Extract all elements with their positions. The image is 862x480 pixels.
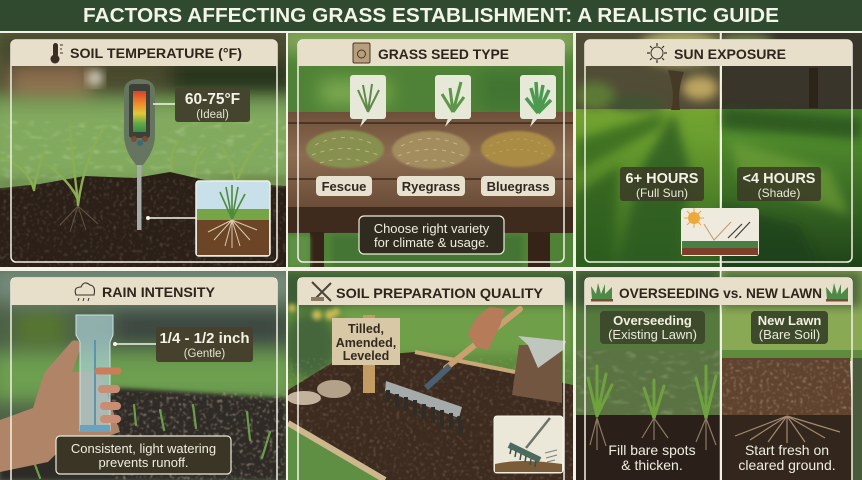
heading: grass seed type: GRASS SEED TYPE (378, 46, 509, 62)
icon: hand and rain gauge (0, 315, 120, 472)
callout: ideal temperature: (Ideal) (196, 109, 229, 121)
text: fill bare spots: Fill bare spots (608, 442, 696, 458)
callout: choose variety: for climate & usage. (374, 235, 489, 250)
seed card: bluegrass (520, 75, 556, 127)
label: bluegrass: Bluegrass (487, 179, 549, 194)
heading: overseeding vs new lawn (585, 278, 852, 305)
label: full sun: (Full Sun) (636, 186, 688, 200)
sign (332, 315, 400, 393)
flowers (288, 304, 340, 320)
text: start fresh (738, 442, 836, 473)
text: start fresh: Start fresh on (745, 442, 829, 458)
soil bed (288, 352, 573, 480)
overseeding side (576, 271, 721, 480)
callout: gentle rain (113, 327, 253, 362)
heading: overseeding vs new lawn: OVERSEEDING vs. NEW LAWN (619, 285, 822, 301)
label: new lawn: (Bare Soil) (759, 327, 820, 342)
callout: consistent watering: prevents runoff. (98, 455, 189, 470)
callout: gentle rain: (Gentle) (184, 348, 225, 360)
callout: choose variety (359, 216, 504, 254)
frame (298, 40, 564, 262)
table (288, 112, 573, 267)
seed card: fescue (350, 75, 386, 127)
panel: sun exposure (575, 30, 862, 267)
panel: grass seed type (280, 28, 580, 267)
heading: sun exposure (585, 40, 852, 66)
panel: soil temperature (0, 25, 300, 267)
panel: rain intensity (0, 265, 300, 480)
label: bluegrass (481, 176, 555, 196)
text: fill bare spots: & thicken. (621, 457, 683, 473)
label: new lawn (751, 311, 828, 344)
title banner: FACTORS AFFECTING GRASS ESTABLISHMENT: A REALISTIC GUIDE (83, 4, 779, 27)
callout: consistent watering: Consistent, light watering (71, 441, 216, 456)
label: new lawn: New Lawn (758, 313, 821, 328)
frame (11, 278, 277, 480)
wet soil (0, 388, 286, 480)
icon: soil bag (512, 336, 566, 403)
callout: gentle rain: 1/4 - 1/2 inch (159, 330, 250, 347)
frame (585, 278, 852, 480)
title banner (0, 0, 862, 31)
panel: soil preparation (280, 271, 580, 480)
full sun side (575, 30, 722, 267)
heading: rain intensity (11, 278, 277, 305)
label: shade (737, 167, 821, 201)
shade side (717, 33, 862, 267)
label: overseeding: (Existing Lawn) (608, 327, 697, 342)
callout: consistent watering (56, 436, 231, 474)
label: fescue (316, 176, 372, 196)
inset: root diagram (146, 181, 270, 256)
heading: grass seed type (298, 40, 564, 66)
callout: ideal temperature: 60-75°F (185, 91, 240, 108)
sign: Amended, (336, 336, 396, 350)
label: ryegrass: Ryegrass (402, 179, 460, 194)
seed card: ryegrass (435, 75, 471, 127)
heading: rain intensity: RAIN INTENSITY (102, 285, 215, 300)
icon: rake and hand (385, 307, 520, 433)
icon: soil probe meter (124, 79, 155, 230)
sign: Tilled, (348, 322, 384, 336)
heading: soil temperature (11, 40, 277, 66)
text: start fresh: cleared ground. (738, 457, 836, 473)
new lawn side (722, 271, 862, 480)
frame (585, 40, 852, 262)
frame (298, 278, 564, 480)
label: overseeding (600, 311, 705, 344)
callout: choose variety: Choose right variety (374, 221, 490, 236)
inset: rake diagram (494, 416, 563, 473)
label: overseeding: Overseeding (613, 313, 692, 328)
label: full sun: 6+ HOURS (626, 171, 699, 187)
label: shade: (Shade) (758, 186, 800, 200)
heading: soil temperature: SOIL TEMPERATURE (°F) (70, 46, 242, 61)
text: fill bare spots (608, 442, 696, 473)
heading: sun exposure: SUN EXPOSURE (674, 46, 786, 62)
rocks (287, 380, 351, 405)
inset: sun angle diagram (681, 208, 759, 256)
frame (11, 40, 277, 262)
sign: Leveled (343, 349, 389, 363)
panel: overseeding vs new lawn (576, 271, 862, 480)
label: shade: <4 HOURS (743, 171, 816, 187)
seed piles (306, 130, 555, 169)
label: ryegrass (397, 176, 465, 196)
soil ground (0, 172, 286, 267)
heading: soil preparation quality: SOIL PREPARATION QUALITY (336, 285, 544, 301)
callout: ideal temperature (153, 88, 250, 122)
heading: soil preparation quality (298, 278, 564, 305)
label: full sun (620, 167, 704, 201)
seedlings (2, 125, 262, 205)
label: fescue: Fescue (322, 179, 366, 194)
